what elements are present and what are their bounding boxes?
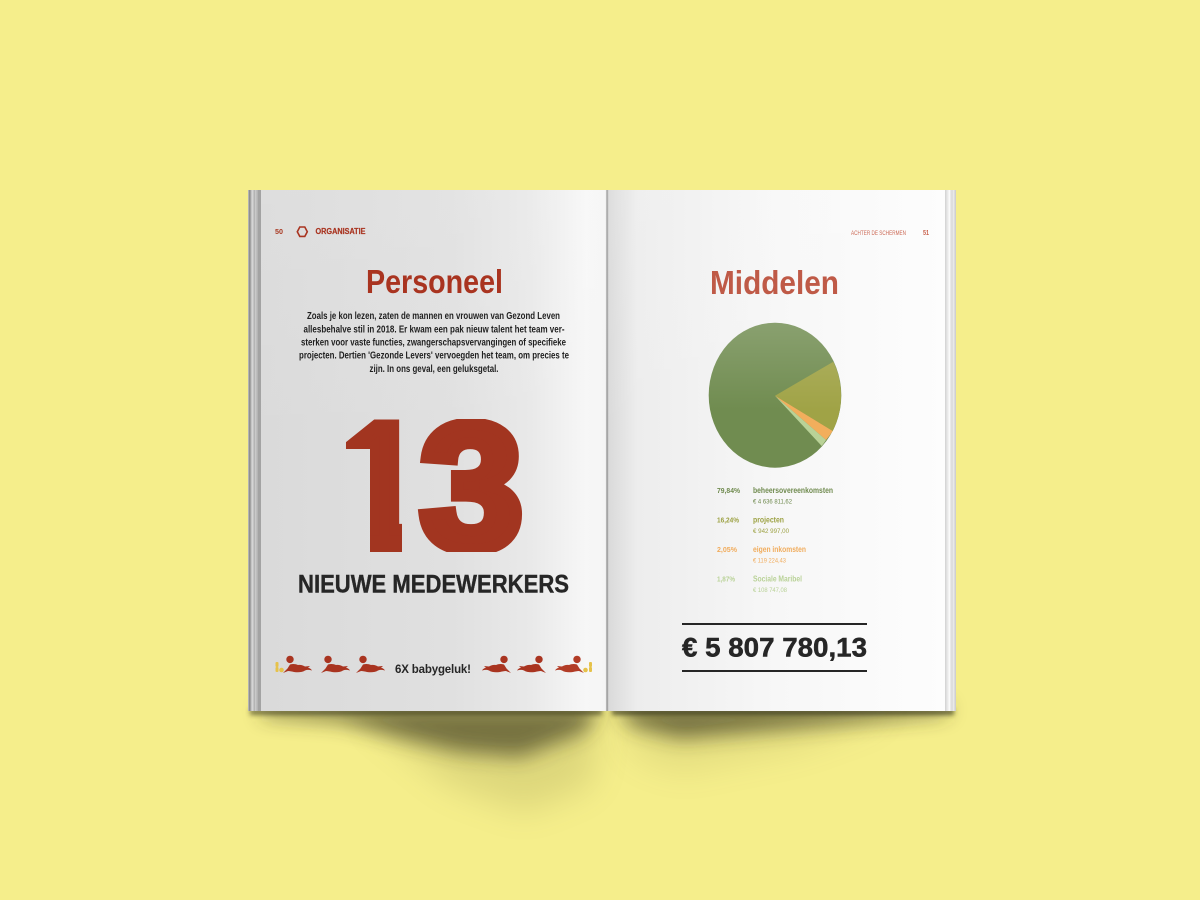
legend item: eigen inkomsten: € 119 224,43 — [753, 558, 786, 564]
icon: rattle left — [276, 662, 284, 672]
legend item: Sociale Maribel — [717, 574, 802, 594]
icon: baby 1 — [283, 656, 312, 673]
slice: projecten — [775, 362, 841, 431]
icon: baby 5 — [517, 656, 546, 673]
page number: 50 — [275, 229, 283, 236]
text block: intro: sterken voor vaste functies, zwangerschapsvervangingen of specifieke — [301, 336, 566, 348]
heading: nieuwe medewerkers: NIEUWE MEDEWERKERS — [298, 571, 569, 599]
legend item: beheersovereenkomsten: 79,84% — [717, 488, 741, 495]
icon: baby 2 — [321, 656, 350, 673]
text block: intro: projecten. Dertien 'Gezonde Levers' vervoegden het team, om precies te — [299, 350, 569, 362]
icon: baby 4 — [482, 656, 511, 673]
legend item: Sociale Maribel: 1,87% — [717, 576, 736, 584]
legend item: eigen inkomsten — [717, 545, 806, 564]
big number 13 — [346, 419, 522, 552]
book shadow — [250, 706, 954, 812]
baby row — [276, 656, 592, 676]
big number 13: 1 — [341, 387, 421, 586]
baby caption: 6X babygeluk! — [395, 664, 471, 676]
legend item: Sociale Maribel: € 108 747,08 — [753, 587, 787, 594]
page stack right — [944, 190, 956, 711]
slice: beheersovereenkomsten — [709, 323, 841, 468]
legend — [717, 486, 833, 594]
section label: ACHTER DE SCHERMEN — [851, 230, 906, 237]
legend item: beheersovereenkomsten — [717, 486, 833, 506]
text block: intro: Zoals je kon lezen, zaten de mannen en vrouwen van Gezond Leven — [307, 310, 560, 322]
section label: ORGANISATIE — [316, 227, 366, 236]
legend item: beheersovereenkomsten: beheersovereenkomsten — [753, 486, 833, 495]
panel: left page — [261, 190, 607, 711]
page stack left — [248, 190, 261, 711]
infographic: open book mockup — [246, 190, 958, 813]
book block — [248, 190, 956, 711]
legend item: projecten: projecten — [753, 516, 784, 524]
legend item: projecten: 16,24% — [717, 518, 740, 524]
icon: baby 6 — [555, 656, 584, 673]
left page header — [275, 227, 366, 236]
legend item: projecten: € 942 997,00 — [753, 528, 789, 535]
icon: baby 3 — [356, 656, 385, 673]
heading: Middelen: Middelen — [710, 264, 839, 301]
icon: rattle right — [583, 662, 592, 672]
legend item: beheersovereenkomsten: € 4 636 811,62 — [753, 498, 792, 506]
legend item: eigen inkomsten: 2,05% — [717, 547, 738, 554]
legend item: projecten — [717, 516, 789, 535]
panel: right page — [607, 190, 945, 711]
text block: intro: allesbehalve stil in 2018. Er kwam een pak nieuw talent het team ver- — [304, 323, 565, 335]
pie chart — [709, 323, 841, 468]
text block: intro: zijn. In ons geval, een geluksgetal. — [370, 363, 499, 375]
slice: eigen inkomsten — [775, 396, 833, 440]
page number: 51 — [923, 230, 929, 237]
right page header — [851, 230, 929, 237]
heading: Personeel: Personeel — [366, 263, 503, 300]
legend item: eigen inkomsten: eigen inkomsten — [753, 545, 806, 554]
slice: Sociale Maribel — [775, 396, 826, 446]
text block: intro — [299, 310, 569, 375]
total amount: € 5 807 780,13 — [682, 632, 867, 662]
highlight — [709, 323, 841, 468]
big number 13: 3 — [420, 387, 522, 586]
legend item: Sociale Maribel: Sociale Maribel — [753, 574, 802, 584]
icon: hexagon — [297, 227, 307, 236]
